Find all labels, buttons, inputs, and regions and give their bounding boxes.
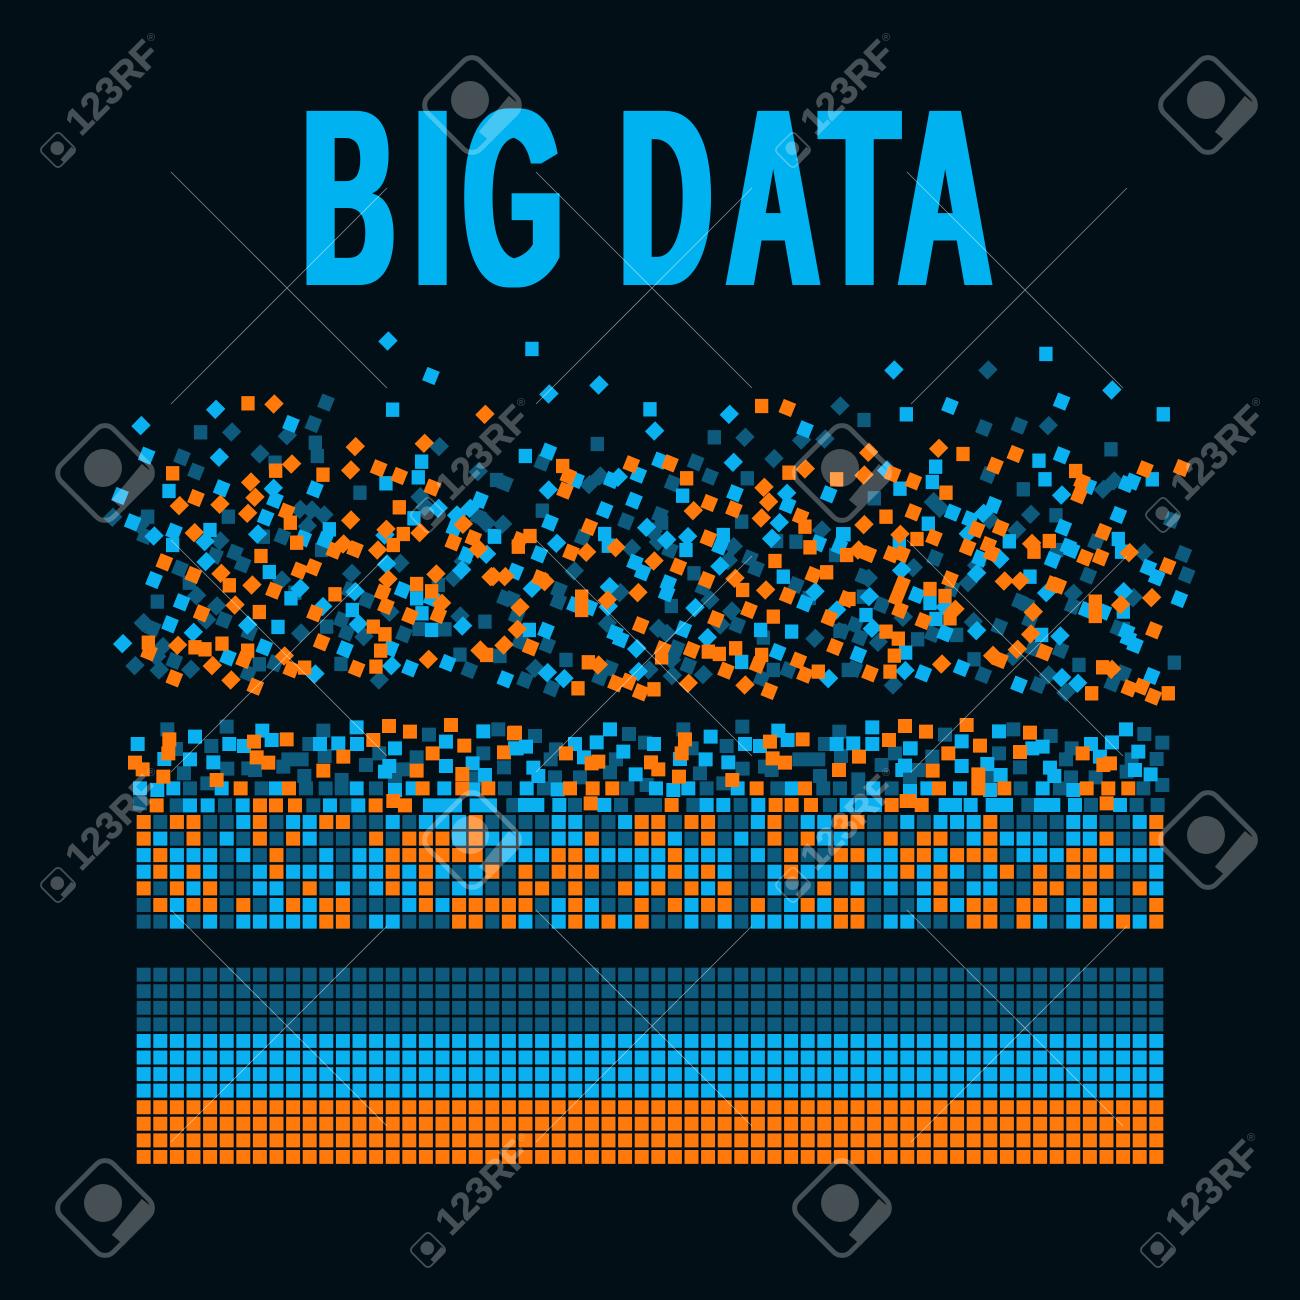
semi-scattered band	[128, 725, 1169, 805]
particles: right section	[836, 399, 1193, 699]
watermark: 123RF marks: 123RF	[428, 1133, 538, 1243]
watermark: 123RF marks: 123RF	[58, 33, 168, 143]
watermark: 123RF marks: ®	[882, 767, 890, 779]
watermark: 123RF marks: 123RF	[428, 398, 538, 508]
watermark: 123RF marks: ®	[1247, 1132, 1255, 1144]
band: right section	[898, 725, 1169, 805]
particles: left section	[108, 399, 503, 689]
watermark: 123RF marks: 123RF	[793, 33, 903, 143]
band: left section	[128, 725, 522, 805]
watermark: 123RF marks: 123RF	[793, 768, 903, 878]
watermark: 123RF marks: ®	[517, 397, 525, 409]
watermark: 123RF marks: ®	[517, 1132, 525, 1144]
watermark: 123RF marks: 123RF	[1158, 1133, 1268, 1243]
watermark: 123RF marks: ®	[1252, 397, 1260, 409]
watermark: 123RF marks: ®	[147, 767, 155, 779]
watermark: 123RF marks: 123RF	[1163, 398, 1273, 508]
watermark: 123RF marks: 123RF	[58, 768, 168, 878]
mosaic grid: mixed colours	[137, 822, 1166, 922]
scattered data particles	[108, 336, 1193, 699]
band: centre section	[508, 726, 917, 805]
particles: far top	[383, 336, 1117, 399]
particles: centre section	[488, 401, 855, 695]
title: BIG DATA	[303, 57, 991, 339]
watermark: 123RF marks: ®	[147, 32, 155, 44]
watermark: 123RF marks: ®	[882, 32, 890, 44]
watermark diagonal lines	[171, 172, 1127, 1142]
ordered grid: dark, blue and orange rows	[137, 975, 1166, 1157]
